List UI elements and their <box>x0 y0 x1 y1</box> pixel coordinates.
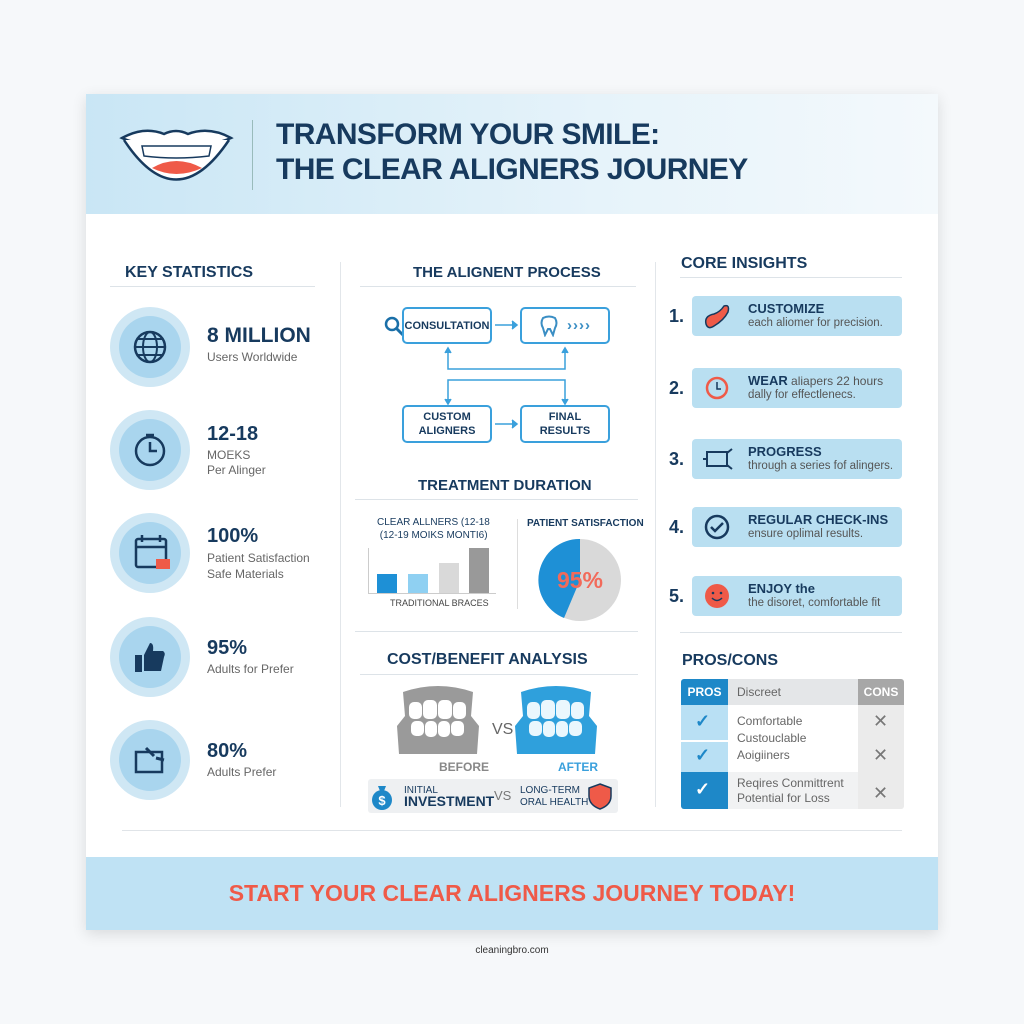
header banner <box>86 94 938 214</box>
table: PROS <box>687 685 722 699</box>
box: final results <box>520 405 610 443</box>
insight 4 <box>669 507 902 547</box>
insight 5 <box>669 576 902 616</box>
stat 4: Adults for Prefer <box>207 662 294 676</box>
insight 3: through a series fof alingers. <box>748 460 893 472</box>
title <box>276 118 748 186</box>
heading: CORE INSIGHTS <box>681 255 807 272</box>
icon: before teeth <box>397 686 479 754</box>
panel: cost/benefit: VS <box>492 721 513 738</box>
investment vs health bar: INVESTMENT <box>404 793 494 809</box>
panel: treatment duration <box>355 477 644 621</box>
investment vs health bar <box>368 779 618 813</box>
stat 1: 8 MILLION <box>207 324 311 347</box>
table: ✓ <box>695 711 710 731</box>
investment vs health bar: LONG-TERM <box>520 785 580 796</box>
pie chart: patient satisfaction: 95% <box>557 567 603 593</box>
insight 2: WEAR aliapers 22 hours <box>748 373 883 388</box>
insight 5: 5. <box>669 586 684 606</box>
icon: magnifier <box>384 316 402 336</box>
bar chart: CLEAR ALLNERS (12-18 <box>377 517 490 528</box>
insight 1: each aliomer for precision. <box>748 317 883 329</box>
heading: COST/BENEFIT ANALYSIS <box>387 651 588 668</box>
insight 1: CUSTOMIZE <box>748 301 824 316</box>
box: final results: RESULTS <box>540 425 590 437</box>
panel: key statistics <box>110 264 315 800</box>
insight 4: 4. <box>669 517 684 537</box>
box: custom aligners: ALIGNERS <box>419 425 475 437</box>
stat 3: Safe Materials <box>207 567 284 581</box>
insight 5: ENJOY the <box>748 581 815 596</box>
icon: after teeth <box>515 686 597 754</box>
stat 5 <box>110 720 276 800</box>
table: ✓ <box>695 779 710 799</box>
insight 2: dally for effectlenecs. <box>748 389 856 401</box>
box: consultation <box>402 307 492 344</box>
table: ✕ <box>873 711 888 731</box>
heading: PROS/CONS <box>682 652 778 669</box>
table <box>681 679 904 809</box>
stat 4: 95% <box>207 637 247 659</box>
footer call to action: START YOUR CLEAR ALIGNERS JOURNEY TODAY! <box>229 880 795 906</box>
heading: THE ALIGNENT PROCESS <box>413 264 601 281</box>
insight 2: 2. <box>669 378 684 398</box>
heading: TREATMENT DURATION <box>418 477 592 494</box>
panel: cost/benefit: AFTER <box>558 760 598 774</box>
heading: KEY STATISTICS <box>125 264 253 281</box>
box: final results: FINAL <box>549 411 581 423</box>
box: consultation: CONSULTATION <box>405 320 489 332</box>
investment vs health bar: VS <box>494 788 511 803</box>
box: tooth: ›››› <box>567 316 591 334</box>
bar chart: TRADITIONAL BRACES <box>390 598 489 608</box>
table: ✕ <box>873 745 888 765</box>
insight 3 <box>669 439 902 479</box>
stat 2: MOEKS <box>207 448 250 462</box>
stat 3: 100% <box>207 525 258 547</box>
investment vs health bar: ORAL HEALTH <box>520 797 588 808</box>
table: CONS <box>864 685 898 699</box>
card <box>86 94 938 930</box>
table: Reqires Conmittrent <box>737 776 844 790</box>
insight 3: PROGRESS <box>748 444 822 459</box>
insight 1: 1. <box>669 306 684 326</box>
box: custom aligners: CUSTOM <box>423 411 471 423</box>
panel: pros/cons <box>681 652 904 809</box>
pie chart: patient satisfaction: PATIENT SATISFACTION <box>527 518 644 529</box>
bar chart <box>368 517 496 608</box>
insight 2 <box>669 368 902 408</box>
table: Potential for Loss <box>737 791 830 805</box>
box: tooth <box>520 307 610 344</box>
stat 2: 12-18 <box>207 423 258 445</box>
stat 2 <box>110 410 266 490</box>
panel: cost/benefit <box>360 651 638 813</box>
stat 2: Per Alinger <box>207 463 266 477</box>
title: TRANSFORM YOUR SMILE: <box>276 118 660 151</box>
stat 5: Adults Prefer <box>207 765 276 779</box>
stat 5: 80% <box>207 740 247 762</box>
investment vs health bar: INITIAL <box>404 785 438 796</box>
table: Discreet <box>737 685 781 699</box>
table: ✕ <box>873 783 888 803</box>
insight 3: 3. <box>669 449 684 469</box>
title: THE CLEAR ALIGNERS JOURNEY <box>276 153 748 186</box>
insight 4: ensure oplimal results. <box>748 528 863 540</box>
insight 1 <box>669 296 902 336</box>
icon: smile <box>119 130 234 181</box>
panel: alignment process <box>360 264 636 443</box>
stat 3 <box>110 513 310 593</box>
stat 1 <box>110 307 311 387</box>
investment vs health bar: $ <box>378 793 386 808</box>
watermark: cleaningbro.com <box>475 945 549 956</box>
stat 3: Patient Satisfaction <box>207 551 310 565</box>
table: Comfortable <box>737 714 802 728</box>
pie chart: patient satisfaction <box>527 518 644 621</box>
footer call to action <box>86 857 938 930</box>
insight 5: the disoret, comfortable fit <box>748 597 880 609</box>
insight 4: REGULAR CHECK-INS <box>748 512 888 527</box>
stat 1: Users Worldwide <box>207 350 297 364</box>
table: Aoigiiners <box>737 748 790 762</box>
table: Custouclable <box>737 731 806 745</box>
stat 4 <box>110 617 294 697</box>
panel: cost/benefit: BEFORE <box>439 760 489 774</box>
box: custom aligners <box>402 405 492 443</box>
table: ✓ <box>695 745 710 765</box>
bar chart: (12-19 MOIKS MONTI6) <box>380 530 488 541</box>
